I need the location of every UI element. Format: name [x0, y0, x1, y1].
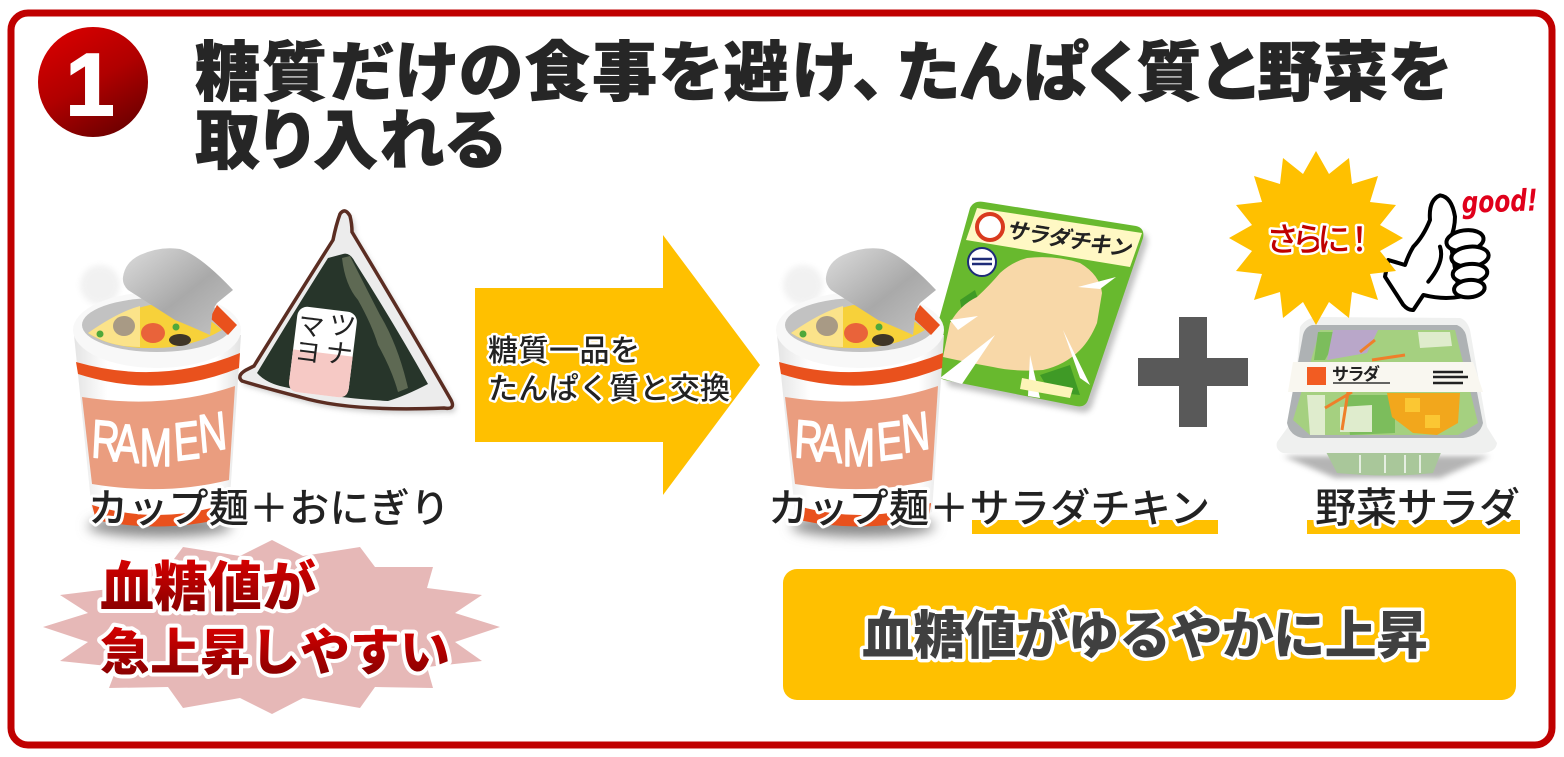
title [195, 36, 1451, 177]
arrow: swap one carb item for protein: 糖質一品を [488, 335, 640, 368]
salad label band: サラダ [1332, 364, 1380, 384]
arrow: swap one carb item for protein: たんぱく質と交換 [488, 373, 730, 406]
illustration: cup ramen (right): RAMEN [793, 399, 932, 477]
good! lettering: good! [1461, 183, 1538, 221]
burst callout: furthermore: さらに！ [1266, 221, 1376, 258]
caption: cup noodles + onigiri: カップ麺＋おにぎり [88, 487, 450, 531]
arrow: swap one carb item for protein [475, 235, 760, 495]
underline: vegetable salad [1307, 520, 1520, 534]
title: 取り入れる [195, 104, 505, 177]
illustration: cup ramen (left) [73, 248, 241, 537]
plus sign [1138, 317, 1248, 427]
callout: blood sugar spikes: 血糖値が [100, 557, 316, 618]
number badge [38, 27, 148, 137]
callout: blood sugar spikes [43, 540, 500, 714]
title: たんぱく質と野菜を [897, 36, 1451, 109]
onigiri label [288, 306, 358, 398]
callout: blood sugar rises gently: 血糖値がゆるやかに上昇 [862, 607, 1428, 666]
burst callout: furthermore [1229, 151, 1403, 325]
illustration: salad chicken pack: サラダチキン [1003, 217, 1137, 261]
illustration: onigiri [240, 211, 455, 413]
caption: vegetable salad: 野菜サラダ [1315, 485, 1520, 531]
illustration: salad chicken pack [925, 202, 1147, 412]
number badge: 1 [66, 35, 114, 134]
callout: blood sugar spikes: 急上昇しやすい [100, 625, 450, 681]
onigiri label: マヨ [293, 310, 326, 369]
onigiri label: ツナ [324, 310, 358, 370]
illustration: salad container [1277, 317, 1497, 478]
caption: cup noodles + salad chicken: カップ麺＋サラダチキン [768, 487, 1210, 531]
title: 糖質だけの食事を避け、 [195, 36, 885, 109]
salad label band [1288, 362, 1483, 392]
illustration: thumbs up [1385, 195, 1489, 310]
illustration: cup ramen (left): RAMEN [90, 399, 229, 477]
illustration: cup ramen (right) [776, 248, 944, 537]
underline: salad chicken [972, 520, 1218, 534]
callout: blood sugar rises gently [783, 569, 1516, 700]
